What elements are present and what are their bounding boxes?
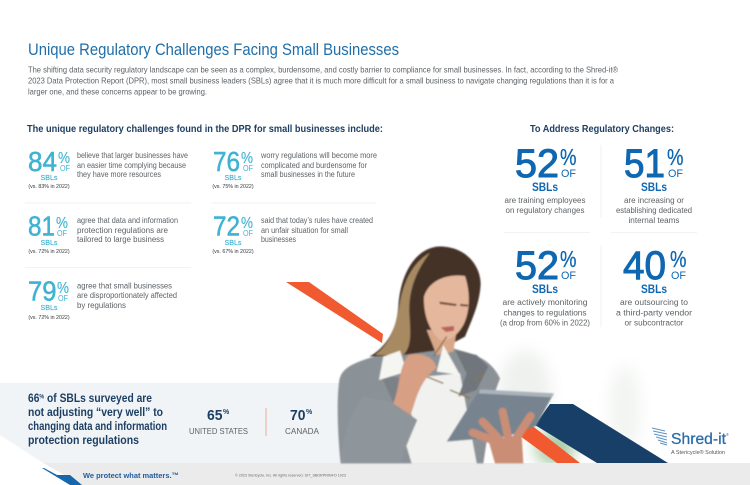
stat: 51% dedicated teams: % [667,144,684,170]
footer copyright: © 2023 Stericycle, Inc. All rights reserved. SIT_SBDRPRINFO 1023 [235,474,346,478]
stat: United States 65% [189,407,248,436]
stat: 76%: worry regulations will become more [260,151,377,160]
stat: 52% training employees: on regulatory changes [506,206,584,215]
stat: 51% dedicated teams: OF [668,168,683,180]
photo background [499,350,641,466]
photo: woman with tablet [338,247,554,463]
bottom stat panel background [0,383,345,463]
stat: 51% dedicated teams: establishing dedicated [616,206,692,215]
glasses [427,337,483,398]
stat: 81%: (vs. 72% in 2022) [28,249,70,255]
stat: 52% training employees: OF [561,168,576,180]
neck [427,330,457,355]
stat: Canada 70%: % [306,409,313,416]
orange diagonal stripe upper [286,282,383,343]
stat: 52% monitoring: SBLs [532,284,558,296]
stat: 79%: (vs. 72% in 2022) [28,315,70,321]
stat: 72%: SBLs [224,238,242,247]
stat: 52% training employees: % [560,144,576,170]
stat: 40% outsourcing: a third-party vendor [616,308,692,318]
stat: 72%: an unfair situation for small [261,226,348,235]
stat: 76%: (vs. 75% in 2022) [212,184,254,190]
stat: 40% outsourcing: % [670,246,686,272]
stat: 40% outsourcing: 40 [623,244,666,288]
eyes and lips [439,302,468,307]
lapel right [455,350,488,397]
footer tagline: We protect what matters.™ [83,471,179,480]
white corner cut [0,435,82,485]
sleeve [341,397,417,463]
stat: 51% dedicated teams: SBLs [641,182,667,194]
bottom stat text: changing data and information [28,421,167,433]
stat: Canada 70%: 70 [290,407,306,424]
hair back [369,247,481,357]
stat: Canada 70%: CANADA [285,427,320,436]
stat: United States 65%: % [223,409,230,416]
stat: 51% dedicated teams: are increasing or [624,196,684,205]
intro paragraph: 2023 Data Protection Report (DPR), most small business leaders (SBLs) agree that it is much more difficult for a small business to navigate changing regulations than it is for a [28,76,614,86]
stat: 51% dedicated teams: internal teams [628,216,680,225]
bottom stat text [28,393,167,447]
stat: 76% [212,146,377,190]
stat: 72%: OF [243,229,253,238]
stat: 79%: OF [58,294,68,303]
stat: 72%: businesses [261,235,296,244]
stat: 79%: 79 [28,276,56,306]
face [424,276,469,340]
navy diagonal shape [535,404,668,463]
stat: United States 65%: 65 [207,407,222,424]
stat: 40% outsourcing: or subcontractor [624,318,684,328]
stat: 76%: complicated and burdensome for [261,161,367,170]
logo: Shred-it: Shred-it [671,431,727,448]
hand at chin [393,354,437,415]
stat: 81%: SBLs [40,238,58,247]
title: Unique Regulatory Challenges Facing Small Businesses [28,40,399,59]
stat: 81%: agree that data and information [77,216,178,225]
stat: 40% outsourcing [616,244,692,328]
footer accent shape [42,468,82,485]
stat: 79%: are disproportionately affected [77,291,177,300]
stat: 40% outsourcing: SBLs [641,284,667,296]
stat: 76%: % [241,150,253,167]
stat: 84%: believe that larger businesses have [77,151,188,160]
collar [379,345,460,380]
stat: 81%: protection regulations are [77,226,169,235]
stat: 84%: an easier time complying because [77,161,186,170]
intro paragraph: larger one, and these concerns appear to be growing. [28,86,207,96]
logo: Shred-it [652,428,729,456]
stat: 84%: OF [60,164,70,173]
stat: 76%: OF [243,164,253,173]
lapel left [380,373,412,417]
stat: 72%: said that today’s rules have created [261,216,373,225]
bottom stat text: % [39,394,45,400]
stat: 84% [28,146,188,190]
stat: 52% training employees: 52 [515,142,559,186]
stat: 81%: tailored to large business [77,235,164,244]
hair highlights [375,253,430,355]
stat: 84%: SBLs [40,173,58,182]
stat: 72%: % [241,215,253,232]
stat: 81%: 81 [28,210,55,242]
hand on tablet [473,412,531,442]
stat: 76%: 76 [213,146,240,177]
bottom stat text: 66 [28,393,41,405]
stat: 81%: OF [57,229,67,238]
stat: 52% training employees: are training employees [504,196,586,205]
blouse [387,373,477,463]
stat: 72%: 72 [213,210,240,242]
stat: 84%: 84 [28,146,57,177]
bottom stat text: protection regulations [28,435,139,447]
stat: 79%: agree that small businesses [77,282,172,290]
stat: 51% dedicated teams [616,142,692,225]
stat: 76%: small businesses in the future [261,170,355,179]
stat: Canada 70% [285,407,320,436]
stat: 79% [28,276,177,321]
logo: Shred-it: A Stericycle® Solution [671,449,725,456]
stat: 52% monitoring: % [560,246,576,272]
jacket [338,348,500,463]
stat: 79%: by regulations [77,301,126,310]
stat: 52% monitoring: are actively monitoring [502,298,588,307]
stat: 79%: % [57,280,69,297]
stat: 52% monitoring [500,244,590,328]
stat: 84%: they have more resources [77,170,161,179]
intro paragraph: The shifting data security regulatory landscape can be seen as a complex, burdensome, and costly barrier to compliance for small businesses. In fact, according to the Shred-it® [28,64,619,74]
stat: 52% monitoring: 52 [515,244,559,288]
stat: United States 65%: UNITED STATES [189,427,248,436]
heading: to address regulatory changes: To Address Regulatory Changes: [530,123,674,135]
heading: regulatory challenges: The unique regulatory challenges found in the DPR for small businesses include: [27,123,383,135]
footer band [43,463,750,485]
stat: 40% outsourcing: OF [671,270,686,282]
stat: 72%: (vs. 67% in 2022) [212,249,254,255]
tablet [447,390,553,442]
stat: 51% dedicated teams: 51 [624,142,665,186]
stat: 72% [212,210,373,255]
stat: 79%: SBLs [40,303,58,312]
stat: 40% outsourcing: are outsourcing to [620,298,689,307]
orange diagonal stripe lower [500,402,580,463]
stat: 84%: % [58,150,70,167]
stat: 52% monitoring: changes to regulations [504,308,586,318]
stat: 81%: % [56,215,68,232]
stat: 76%: SBLs [224,173,242,182]
stat: 84%: (vs. 83% in 2022) [28,184,70,190]
bottom stat text: of SBLs surveyed are [44,393,152,405]
stat: 52% training employees [504,142,586,215]
bottom stat text: not adjusting “very well” to [28,407,163,419]
stat: 52% training employees: SBLs [532,182,558,194]
intro paragraph [28,64,619,96]
stat: 52% monitoring: OF [561,270,576,282]
logo: Shred-it: ® [726,432,729,437]
stat: 81% [28,210,178,255]
stat: 52% monitoring: (a drop from 60% in 2022) [500,318,590,328]
